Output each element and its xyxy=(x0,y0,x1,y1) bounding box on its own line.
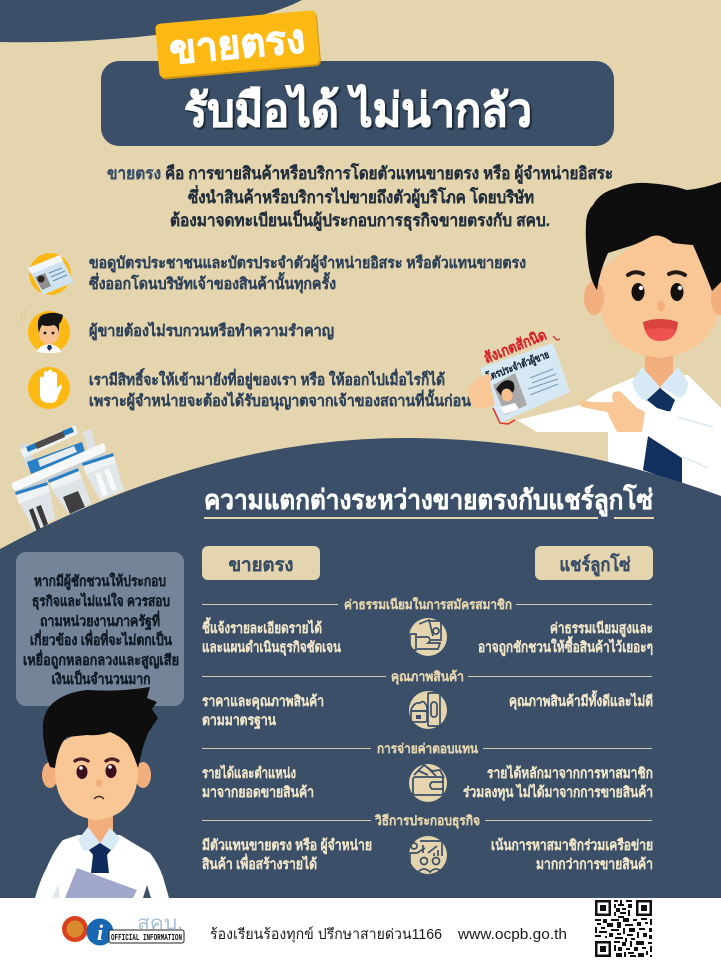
brows xyxy=(628,272,685,275)
pointing hand xyxy=(579,391,645,432)
item 3 text: เพราะผู้จำหน่ายจะต้องได้รับอนุญาตจากเจ้าของสถานที่นั้นก่อน xyxy=(89,389,471,412)
row: compensation: ร่วมลงทุน ไม่ได้มาจากการขายสินค้า xyxy=(463,783,653,801)
row: business method: มีตัวแทนขายตรง หรือ ผู้จำหน่าย xyxy=(202,837,372,854)
intro paragraph xyxy=(107,163,613,232)
collar xyxy=(632,367,688,402)
intro paragraph: ซึ่งนำสินค้าหรือบริการไปขายถึงตัวผู้บริโภค โดยบริษัท xyxy=(188,185,534,209)
card xyxy=(480,343,570,424)
ears xyxy=(584,281,604,315)
row: compensation: รายได้และตำแหน่ง xyxy=(202,764,296,782)
folder xyxy=(65,868,137,898)
logo: OCPB official information xyxy=(62,913,184,946)
icon: salesperson xyxy=(22,309,70,353)
row: product quality xyxy=(202,669,653,730)
icon: presentation xyxy=(409,836,447,874)
eyes xyxy=(76,765,88,779)
row: membership fee: ค่าธรรมเนียมในการสมัครสมาชิก xyxy=(344,596,512,612)
item 2 text: ผู้ขายต้องไม่รบกวนหรือทำความรำคาญ xyxy=(89,321,334,342)
face xyxy=(55,722,138,820)
intro paragraph: คือ การขายสินค้าหรือบริการโดยตัวแทนขายตรง หรือ ผู้จำหน่ายอิสระ xyxy=(165,163,613,185)
row: business method xyxy=(202,813,653,873)
logo: OCPB official information: i xyxy=(97,920,104,945)
icon: wallet xyxy=(409,764,447,802)
collar xyxy=(78,827,120,852)
callout: warning: หากมีผู้ชักชวนให้ประกอบ xyxy=(34,572,166,590)
footer contact text xyxy=(210,926,567,943)
column header: pyramid scheme: แชร์ลูกโซ่ xyxy=(560,553,631,577)
row: business method: สินค้า เพื่อสร้างรายได้ xyxy=(202,853,317,873)
row: product quality: ราคาและคุณภาพสินค้า xyxy=(202,693,324,710)
yellow tag: ขายตรง xyxy=(168,17,307,73)
top left blob xyxy=(0,0,302,42)
row: membership fee: อาจถูกชักชวนให้ซื้อสินค้าไว้เยอะๆ xyxy=(478,636,653,656)
sleeve xyxy=(642,411,721,492)
row: compensation: มาจากยอดขายสินค้า xyxy=(202,784,314,801)
callout: warning: เกี่ยวข้อง เพื่อที่จะไม่ตกเป็น xyxy=(30,629,172,649)
footer band xyxy=(0,898,721,960)
column header: direct sales xyxy=(202,546,320,580)
title pill xyxy=(101,61,614,146)
hair xyxy=(43,687,158,768)
row: membership fee: ชี้แจ้งรายละเอียดรายได้ xyxy=(202,617,322,637)
dark lower panel xyxy=(0,438,721,900)
callout: warning: ถามหน่วยงานภาครัฐที่ xyxy=(40,610,160,631)
logo: OCPB official information: สคบ. xyxy=(137,913,183,934)
character: worried man xyxy=(35,687,169,898)
card: โตรประจำตัวผู้ขาย xyxy=(484,348,551,385)
column header: direct sales: ขายตรง xyxy=(228,555,294,576)
row: product quality: ตามมาตรฐาน xyxy=(202,713,276,730)
QR code xyxy=(595,900,652,957)
row: membership fee xyxy=(202,596,653,656)
title pill: รับมือได้ ไม่น่ากลัว xyxy=(184,84,532,136)
tie xyxy=(647,388,675,412)
holding hand xyxy=(468,374,495,408)
item 3 text xyxy=(89,368,471,412)
item 1 text: ขอดูบัตรประชาชนและบัตรประจำตัวผู้จำหน่ายอิสระ หรือตัวแทนขายตรง xyxy=(89,254,526,274)
callout: warning: เงินเป็นจำนวนมาก xyxy=(52,669,150,688)
shirt xyxy=(517,375,721,510)
row: compensation xyxy=(202,741,653,801)
icon: money in hand xyxy=(409,618,447,656)
title pill: รับมือได้ ไม่น่ากลัว xyxy=(186,86,534,138)
column header: pyramid scheme xyxy=(535,546,653,580)
brows xyxy=(75,759,118,761)
icon: id card xyxy=(28,253,74,295)
row: business method: มากกว่าการขายสินค้า xyxy=(536,856,653,873)
neck xyxy=(88,812,113,845)
neck xyxy=(645,352,673,390)
footer contact text: www.ocpb.go.th xyxy=(457,927,567,943)
mouth xyxy=(94,796,104,799)
row: compensation: รายได้หลักมาจากการหาสมาชิก xyxy=(487,764,653,782)
item 1 text: ซึ่งออกโดนบริษัทเจ้าของสินค้านั้นทุกครั้ง xyxy=(89,272,336,294)
icon: stop hand xyxy=(28,367,70,409)
row: product quality: คุณภาพสินค้า xyxy=(391,669,464,685)
yellow tag xyxy=(155,10,321,80)
row: business method: เน้นการหาสมาชิกร่วมเครือข่าย xyxy=(491,837,653,854)
hair xyxy=(586,182,721,291)
ears xyxy=(42,762,58,788)
red note text: สังเกตสักนิด xyxy=(481,326,549,367)
tie xyxy=(89,843,111,873)
footer contact text: ร้องเรียนร้องทุกข์ ปรึกษาสายด่วน1166 xyxy=(210,926,442,943)
callout: warning: เหยื่อถูกหลอกลวงและสูญเสีย xyxy=(23,649,179,669)
row: product quality: คุณภาพสินค้ามีทั้งดีและไม่ดี xyxy=(509,690,653,710)
row: membership fee: และแผนดำเนินธุรกิจชัดเจน xyxy=(202,639,341,656)
callout: warning: ธุรกิจและไม่แน่ใจ ควรสอบ xyxy=(32,592,170,610)
mouth xyxy=(643,319,678,341)
nose xyxy=(96,779,102,787)
row: compensation: การจ่ายค่าตอบแทน xyxy=(377,741,478,756)
comparison heading: ความแตกต่างระหว่างขายตรงกับแชร์ลูกโซ่ xyxy=(204,483,653,517)
intro paragraph: ต้องมาจดทะเบียนเป็นผู้ประกอบการธุรกิจขายตรงกับ สคบ. xyxy=(170,208,550,232)
character: smiling man holding card xyxy=(468,182,721,510)
face xyxy=(600,232,721,358)
nose xyxy=(657,300,665,312)
building illustration xyxy=(12,425,124,532)
item 1 text xyxy=(89,254,526,294)
item 3 text: เรามีสิทธิ์จะให้เข้ามายังที่อยู่ของเรา หรือ ให้ออกไปเมื่อไรก็ได้ xyxy=(89,368,445,391)
row: membership fee: ค่าธรรมเนียมสูงและ xyxy=(550,620,653,637)
eyes xyxy=(632,283,644,301)
row: business method: วิธีการประกอบธุรกิจ xyxy=(374,813,480,829)
icon: cosmetics xyxy=(409,691,447,729)
intro paragraph: ขายตรง xyxy=(107,164,161,183)
shirt xyxy=(35,835,169,898)
callout: warning xyxy=(16,552,184,706)
logo: OCPB official information: OFFICIAL INFORMATION xyxy=(111,933,182,943)
